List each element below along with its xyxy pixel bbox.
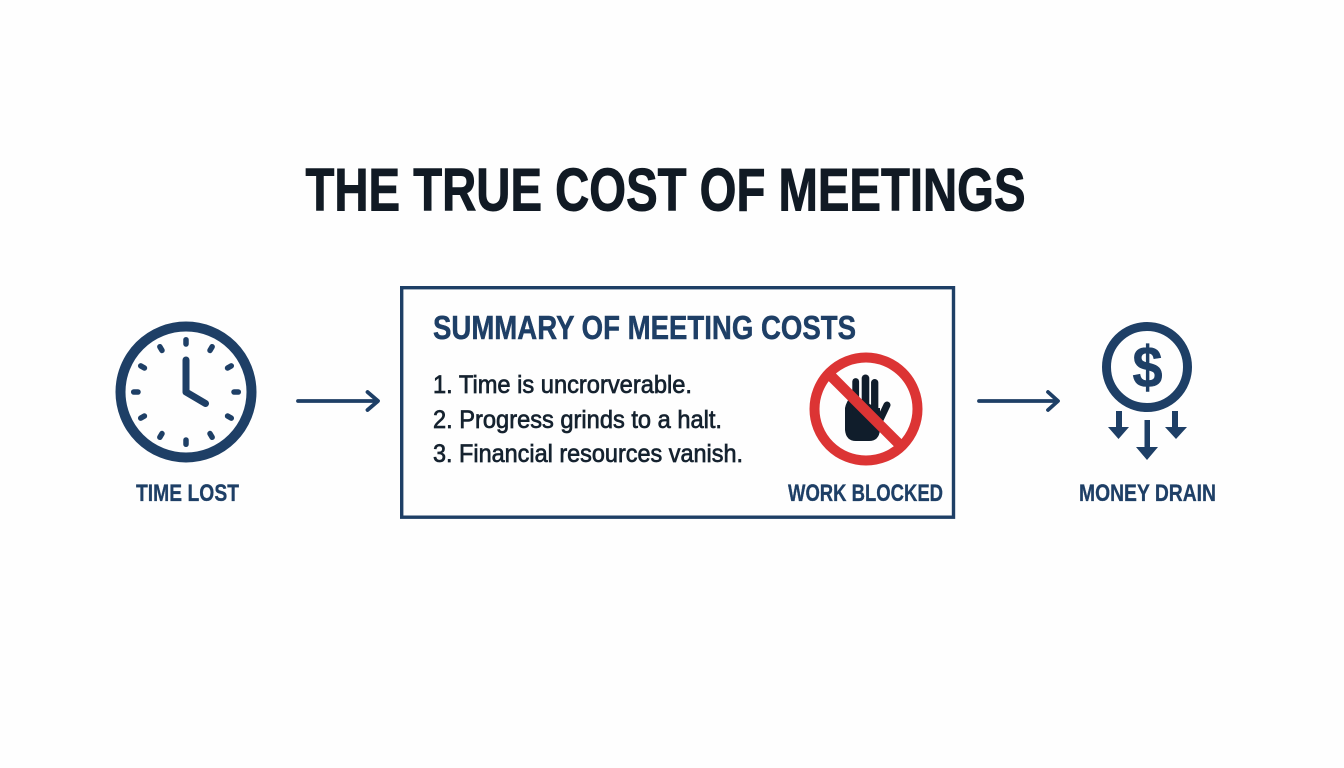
label: money drain: MONEY DRAIN <box>1079 480 1216 507</box>
icon: money drain <box>1106 326 1188 460</box>
list of costs: 1. Time is uncrorverable. <box>433 371 692 399</box>
label: work blocked: WORK BLOCKED <box>788 480 943 507</box>
label: time lost: TIME LOST <box>136 480 239 507</box>
list of costs: 3. Financial resources vanish. <box>433 440 743 468</box>
panel heading: SUMMARY OF MEETING COSTS <box>433 309 856 346</box>
list of costs: 2. Progress grinds to a halt. <box>433 406 722 434</box>
arrow: summary to money <box>979 392 1058 410</box>
title: THE TRUE COST OF MEETINGS <box>306 156 1026 224</box>
arrow: time to summary <box>298 392 378 410</box>
icon: money drain: $ <box>1132 335 1162 400</box>
list of costs <box>433 371 743 468</box>
icon: blocked hand <box>814 358 918 460</box>
panel: summary of meeting costs <box>402 288 954 517</box>
icon: clock <box>120 326 252 458</box>
